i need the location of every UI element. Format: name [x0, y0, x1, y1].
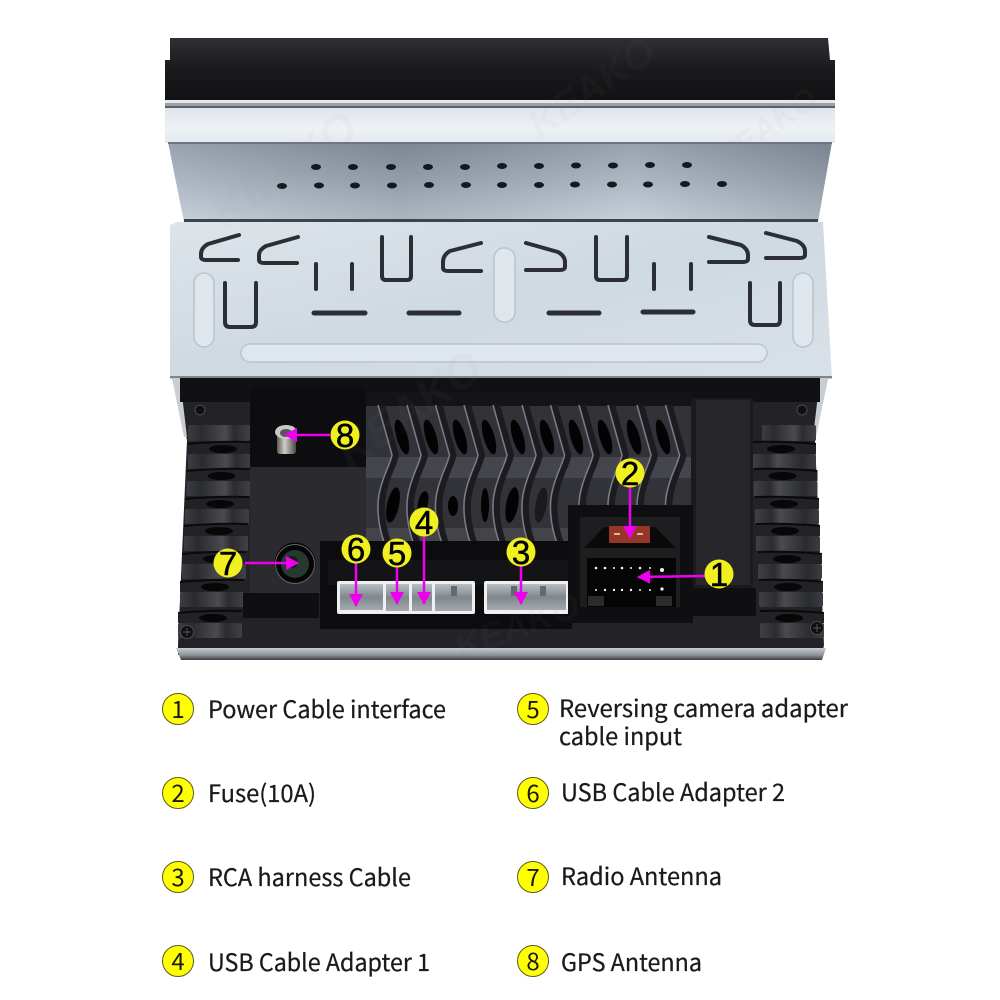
- faint watermarks: KEAKO: [201, 100, 367, 238]
- badge 8: 8: [336, 417, 354, 454]
- screws: [180, 405, 824, 638]
- legend item 5: [518, 689, 849, 752]
- faint watermarks: KEAKO: [326, 340, 492, 478]
- arrow 1: [638, 576, 705, 577]
- white connector block (ports 4, 5, 6): [337, 581, 475, 614]
- faint watermarks: KEAKO: [520, 28, 663, 147]
- lower connector panel: [320, 541, 572, 629]
- fuse: [609, 526, 650, 543]
- badge 5: 5: [388, 535, 406, 572]
- callout arrows: [245, 435, 705, 606]
- arrow 8: [285, 434, 330, 436]
- slots: [201, 233, 805, 327]
- legend: [162, 689, 849, 978]
- white top band: [165, 108, 835, 143]
- body silhouette: [172, 378, 828, 655]
- arrow 7: [245, 562, 298, 564]
- arrow 6: [355, 562, 357, 606]
- legend item 2: 2: [171, 774, 185, 809]
- badge 6: [342, 531, 370, 568]
- legend item 5: 5: [526, 690, 540, 725]
- legend item 2: Fuse(10A): [208, 774, 316, 809]
- legend item 3: 3: [171, 858, 185, 893]
- upper shadow band: [180, 378, 820, 402]
- legend item 1: Power Cable interface: [208, 690, 446, 725]
- badge 3: 3: [512, 534, 530, 571]
- embossed ribs: [194, 248, 813, 362]
- legend item 2: [162, 774, 316, 809]
- badge 1: [704, 556, 734, 593]
- badge 7: 7: [219, 545, 237, 582]
- badge 4: 4: [415, 504, 433, 541]
- legend item 7: 7: [526, 858, 540, 893]
- legend item 6: USB Cable Adapter 2: [561, 773, 785, 808]
- right connector housing: [568, 505, 693, 623]
- badge 3: [506, 534, 536, 571]
- side metal tabs: [172, 378, 187, 437]
- bottom silver strip: [176, 648, 826, 660]
- legend item 8: GPS Antenna: [561, 943, 702, 978]
- badge 1: 1: [710, 556, 728, 593]
- legend item 8: 8: [526, 942, 540, 977]
- right dark column: [691, 398, 753, 588]
- legend item 4: USB Cable Adapter 1: [208, 943, 430, 978]
- arrow 5: [396, 566, 398, 604]
- rear body: [172, 378, 828, 660]
- pin connector: [587, 558, 676, 607]
- perforated metal panel: [168, 142, 832, 222]
- callout badges on photo: [214, 417, 734, 593]
- legend item 4: 4: [171, 942, 185, 977]
- left and right cooling fins: [178, 425, 824, 638]
- top black housing: [165, 38, 835, 108]
- badge 2: [616, 455, 644, 492]
- radio antenna socket: [274, 542, 316, 584]
- legend item 5: Reversing camera adapter: [559, 689, 849, 724]
- badge 6: 6: [347, 531, 365, 568]
- faint watermarks: [201, 28, 824, 668]
- left dark mount block: [250, 388, 366, 467]
- faint watermarks: KEAKO: [708, 80, 824, 176]
- mounting plate with cut-outs: [170, 222, 832, 378]
- faint watermarks: KEAKO: [449, 585, 585, 668]
- badge 4: [410, 504, 438, 541]
- central vent ribs: [366, 392, 691, 542]
- badge 2: 2: [621, 455, 639, 492]
- device photo: head unit rear view: [165, 28, 835, 668]
- arrow 2: [629, 487, 631, 538]
- legend item 6: 6: [526, 774, 540, 809]
- badge 8: [330, 417, 360, 454]
- badge 7: [214, 545, 242, 582]
- white connector block (port 3): [484, 581, 569, 614]
- GPS antenna socket: [275, 425, 297, 454]
- legend item 1: 1: [171, 690, 185, 725]
- badge 5: [382, 535, 412, 572]
- legend item 5: cable input: [559, 717, 682, 752]
- legend item 7: Radio Antenna: [561, 857, 722, 892]
- arrow 3: [520, 566, 522, 604]
- legend item 3: RCA harness Cable: [208, 858, 411, 893]
- arrow 4: [423, 536, 425, 604]
